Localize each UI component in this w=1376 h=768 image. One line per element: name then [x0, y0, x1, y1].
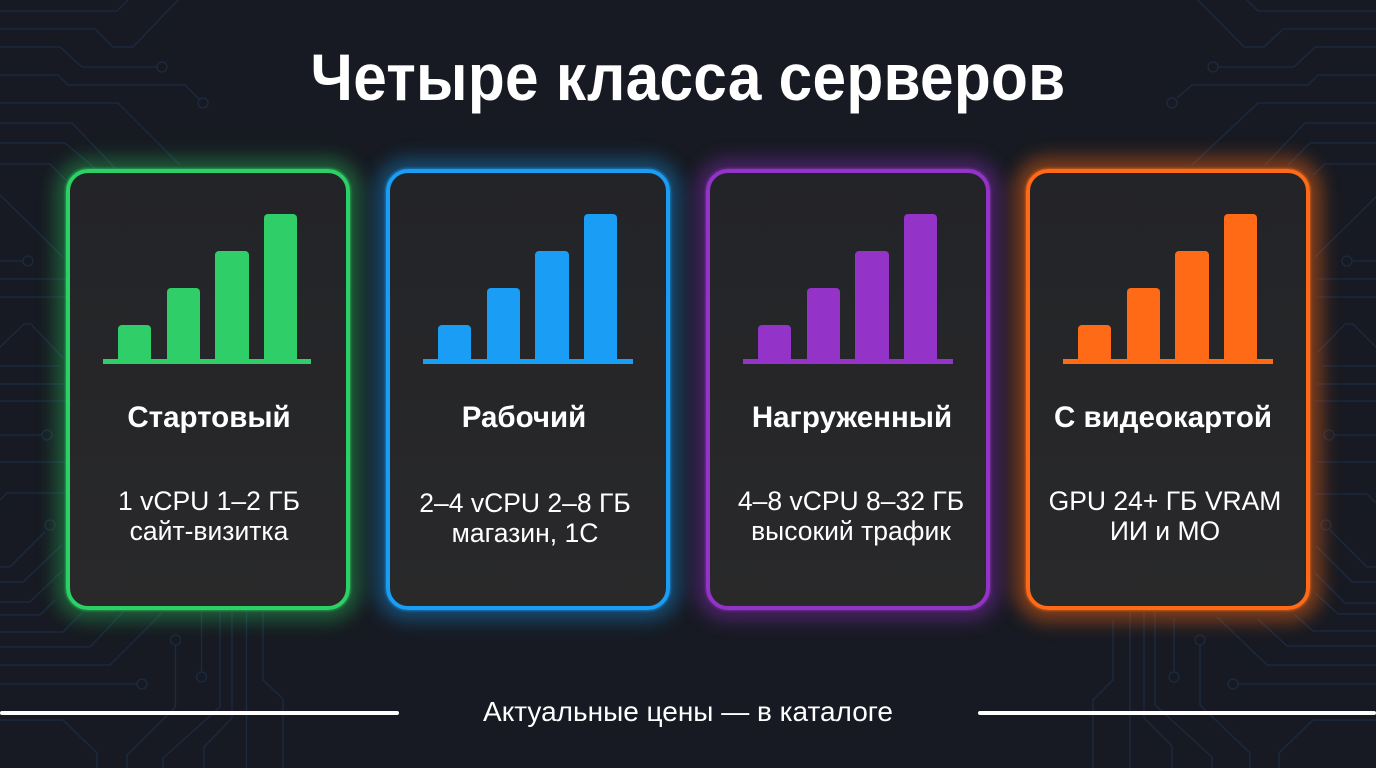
description	[419, 488, 631, 548]
panel: Стартовый	[66, 169, 350, 610]
description: 2–4 vCPU 2–8 ГБ	[419, 488, 631, 518]
description	[118, 486, 300, 546]
description: ИИ и МО	[1110, 516, 1220, 546]
description: 1 vCPU 1–2 ГБ	[118, 486, 300, 516]
icon: purple bar chart	[743, 214, 953, 364]
heading: Стартовый	[127, 401, 291, 434]
icon: orange bar chart	[1063, 214, 1273, 364]
heading: С видеокартой	[1054, 401, 1272, 434]
panel: Рабочий	[386, 169, 670, 610]
heading: Рабочий	[462, 401, 586, 434]
heading: Нагруженный	[752, 401, 952, 434]
title: Четыре класса серверов	[311, 40, 1065, 114]
description	[738, 486, 964, 546]
panel: С видеокартой	[1026, 169, 1310, 610]
description: сайт-визитка	[130, 516, 288, 546]
footer note: Актуальные цены — в каталоге	[483, 696, 893, 727]
description: GPU 24+ ГБ VRAM	[1049, 486, 1281, 516]
description: 4–8 vCPU 8–32 ГБ	[738, 486, 964, 516]
description: магазин, 1С	[452, 518, 598, 548]
icon: green bar chart	[103, 214, 311, 364]
description: высокий трафик	[751, 516, 951, 546]
icon: blue bar chart	[423, 214, 633, 364]
panel: Нагруженный	[706, 169, 990, 610]
description	[1049, 486, 1281, 546]
